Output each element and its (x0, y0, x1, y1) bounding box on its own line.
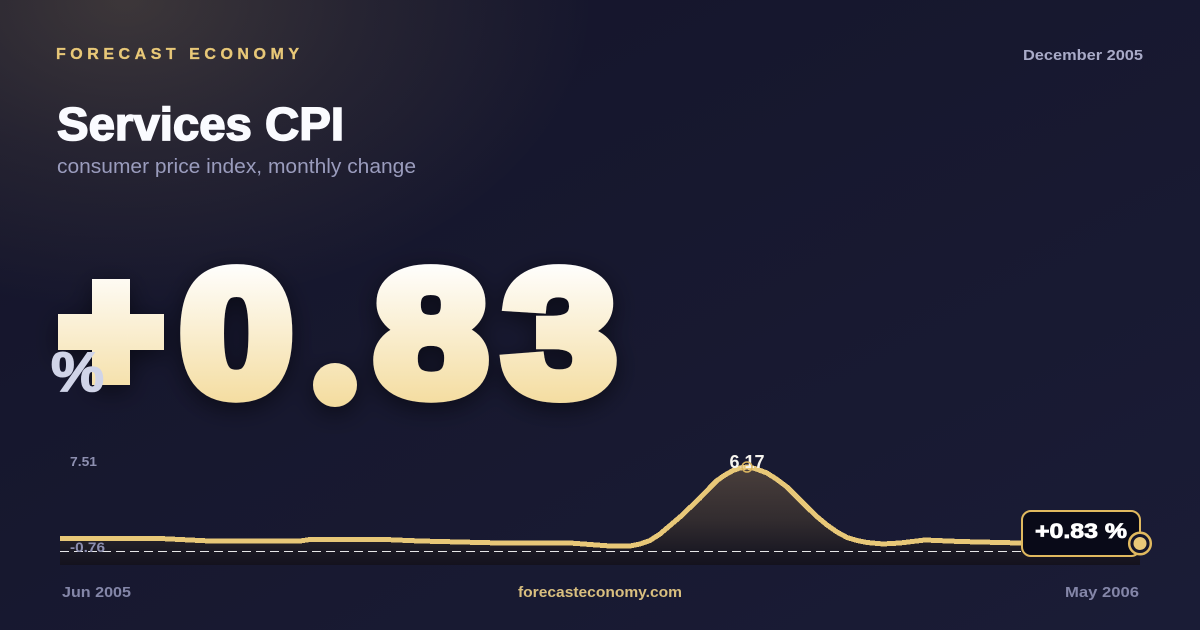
start date: Jun 2005 (62, 584, 131, 601)
date: December 2005 (1023, 47, 1143, 64)
end date: May 2006 (1065, 584, 1139, 601)
brand label: FORECAST ECONOMY (56, 46, 299, 63)
site url: forecasteconomy.com (518, 584, 682, 601)
big value: +0.83 (52, 234, 616, 432)
baseline dashed (60, 550, 1140, 552)
axis max label: 7.51 (70, 454, 97, 469)
subtitle: consumer price index, monthly change (57, 156, 416, 178)
peak marker (742, 462, 752, 472)
percent unit: % (51, 340, 104, 403)
sparkline chart (60, 452, 1151, 565)
axis min label: -0.76 (70, 539, 105, 555)
area fill (60, 467, 1140, 565)
callout: +0.83 % (1035, 520, 1127, 543)
end marker (1129, 533, 1151, 554)
peak label: 6.17 (729, 452, 765, 472)
title: Services CPI (57, 98, 344, 150)
line series (60, 467, 1140, 546)
callout (1022, 511, 1140, 556)
